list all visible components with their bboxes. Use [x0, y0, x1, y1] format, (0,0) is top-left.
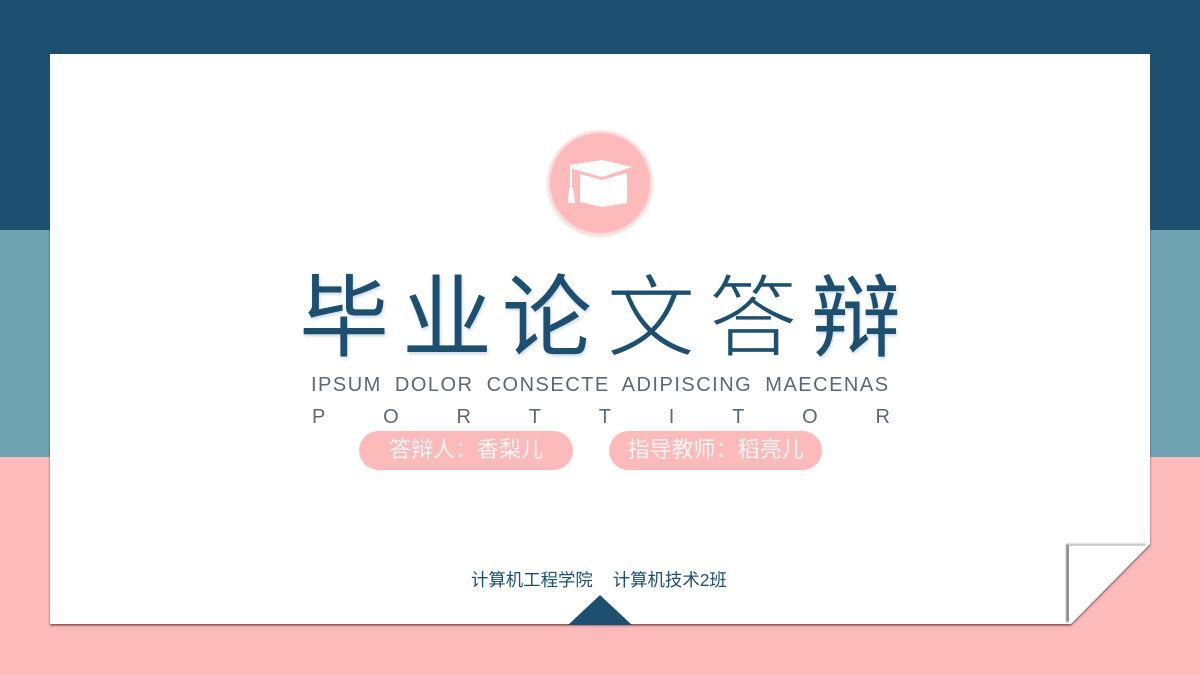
- advisor pill: [609, 431, 822, 470]
- subtitle line 1: IPSUM DOLOR CONSECTE ADIPISCING MAECENAS: [311, 374, 890, 396]
- subtitle line 2: O: [802, 406, 818, 428]
- advisor pill: 指导教师：稻亮儿: [627, 437, 804, 462]
- college and class text: 计算机工程学院 计算机技术2班: [471, 570, 727, 590]
- title: 论: [502, 269, 592, 369]
- subtitle line 2: T: [599, 406, 611, 428]
- subtitle line 2: R: [456, 406, 471, 428]
- subtitle line 2: T: [529, 406, 541, 428]
- title: 毕: [299, 269, 389, 369]
- background band: navy: [0, 0, 1200, 230]
- title: 业: [402, 269, 492, 369]
- title: [299, 269, 901, 369]
- background band: pink: [0, 457, 1200, 675]
- subtitle line 2: [312, 406, 890, 428]
- subtitle line 2: T: [732, 406, 744, 428]
- background band: teal: [0, 230, 1200, 457]
- title: 文: [606, 269, 696, 369]
- subtitle line 2: P: [312, 406, 325, 428]
- subtitle line 2: I: [669, 406, 674, 428]
- presenter pill: [359, 431, 573, 470]
- title: 答: [708, 269, 798, 369]
- title: 辩: [811, 269, 901, 369]
- subtitle line 2: R: [876, 406, 890, 428]
- fold shadow: [1066, 544, 1070, 622]
- presenter pill: 答辩人：香梨儿: [389, 437, 543, 462]
- icon: graduation cap badge: [546, 130, 654, 238]
- bottom triangle marker: [568, 595, 632, 625]
- subtitle line 2: O: [383, 406, 399, 428]
